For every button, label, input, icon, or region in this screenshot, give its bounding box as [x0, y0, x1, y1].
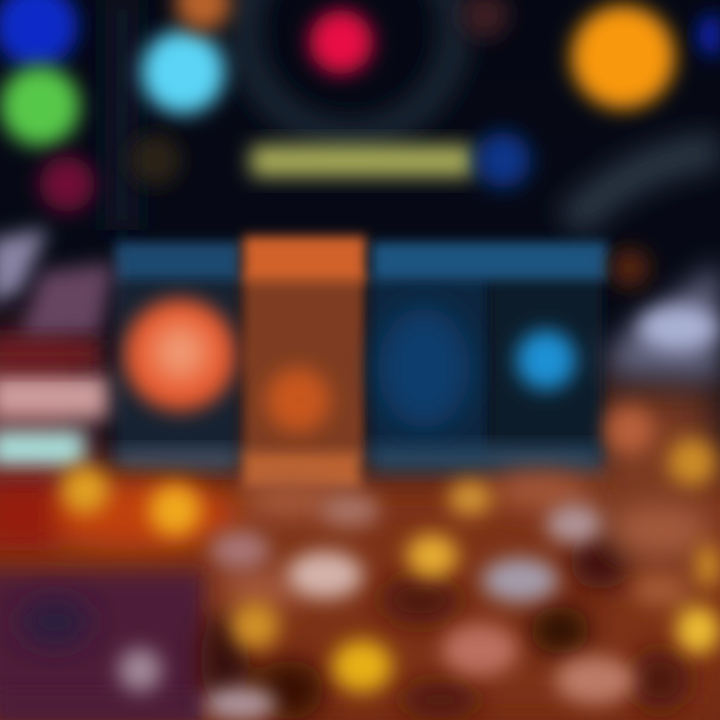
- dark arcs in the upper background: [105, 0, 720, 230]
- paper: cyan stripe: [0, 430, 85, 468]
- paper: right highlight: [638, 306, 718, 350]
- planet: green: [0, 66, 80, 146]
- right stacked papers: [606, 248, 720, 486]
- column body: dark: [490, 275, 602, 460]
- paper: red gap: [0, 340, 100, 368]
- dot: dark orange by table: [610, 248, 650, 288]
- planet: blue: [0, 0, 78, 68]
- icon: blue drop: [378, 308, 470, 428]
- planet: small orange: [175, 0, 231, 31]
- laptop base strip: [0, 690, 200, 720]
- footer: orange: [243, 452, 361, 488]
- header: blue right: [372, 242, 608, 280]
- floor mottling: [201, 472, 710, 720]
- header: blue left: [115, 242, 240, 280]
- title dot: [475, 132, 531, 188]
- lower floor base: [0, 330, 720, 720]
- paper: pink stripe: [0, 375, 108, 419]
- left yellow dots: [61, 466, 201, 536]
- dot: amber: [668, 438, 716, 486]
- laptop dark mark: [19, 598, 91, 646]
- bottom-left laptop panel: [0, 572, 205, 720]
- footer: blue right: [370, 447, 602, 471]
- column body: blue: [370, 275, 490, 460]
- paper: top stripe: [0, 228, 48, 305]
- planet: large orange: [571, 5, 675, 109]
- left yellow glow: [0, 480, 240, 550]
- planet: faint olive: [129, 134, 181, 186]
- title band: [250, 145, 475, 177]
- column body: navy: [115, 275, 240, 460]
- planet: red: [309, 10, 373, 74]
- laptop body: [0, 572, 205, 720]
- paper: right dark roof: [610, 262, 720, 380]
- dot: orange: [606, 406, 654, 454]
- laptop light dot: [118, 648, 162, 692]
- table panel: [115, 236, 608, 488]
- circle: orange glow core: [150, 322, 210, 382]
- column body: orange: [242, 275, 366, 460]
- header: orange: [243, 236, 366, 282]
- paper: purple stripe: [20, 262, 115, 340]
- planet: faint red top: [461, 0, 509, 39]
- planet: dark red: [39, 156, 95, 212]
- circle: orange glow ring: [124, 299, 236, 411]
- circle: bright blue: [516, 330, 576, 390]
- left stacked papers: [0, 228, 115, 468]
- footer: blue left: [115, 450, 240, 470]
- planet: right blue: [698, 13, 720, 57]
- circle: orange column icon: [266, 368, 330, 432]
- bokeh tokens on the floor: [204, 480, 720, 720]
- planet: cyan: [141, 30, 225, 114]
- top planets: [0, 0, 720, 212]
